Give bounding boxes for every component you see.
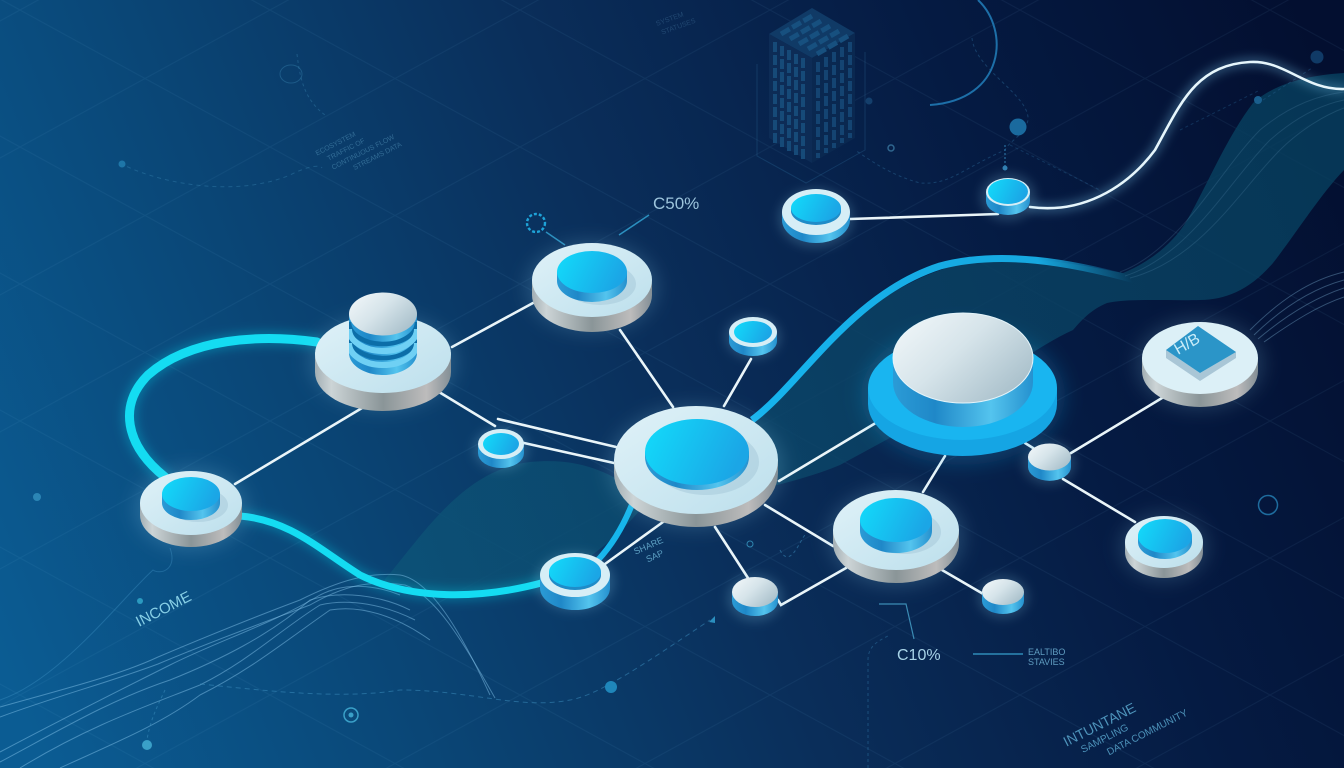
text: faint label top left: CONTINUOUS FLOW — [331, 134, 396, 172]
text: faint label top left: ECOSYSTEM — [315, 131, 357, 157]
text: faint label top centre — [655, 8, 697, 37]
node: small silver right — [1022, 441, 1076, 485]
dashed routes bottom — [0, 535, 890, 768]
left cyan loop flow — [129, 339, 317, 477]
text: faint label top centre: STATUSES — [661, 18, 697, 37]
icon: HB chip tile: H/B — [1172, 330, 1203, 358]
node: small silver lower centre — [727, 574, 783, 622]
icon: small markers — [33, 160, 1278, 750]
callout: C10% with side note: EALTIBO — [1028, 647, 1065, 657]
text: faint label top centre: SYSTEM — [655, 11, 685, 28]
node: small left centre — [473, 427, 529, 471]
lower cyan flow — [240, 502, 633, 595]
icon: dotted target ring — [527, 214, 565, 245]
upper blue flow — [752, 259, 1135, 420]
label: bottom right note: INTUNTANE — [1061, 699, 1138, 749]
node: far right — [1120, 513, 1208, 581]
callout: C10% with side note: C10% — [897, 647, 941, 664]
text: faint label top left: TRAFFIC OF — [326, 138, 366, 163]
node: bottom ring — [535, 552, 615, 612]
node: top ring — [778, 188, 854, 248]
callout: C50%: C50% — [653, 194, 699, 213]
node: top small — [980, 173, 1036, 221]
text: faint label top left: STREAMS DATA — [352, 141, 403, 172]
node: HB chip — [1136, 318, 1264, 410]
background building — [757, 8, 865, 183]
callout: C50% — [619, 194, 699, 235]
white top flow — [1030, 62, 1344, 208]
text: faint label top left — [315, 115, 403, 184]
node: lower right hub — [828, 487, 964, 587]
arc and dashed routes top right — [855, 0, 1312, 190]
faint lines right of wave — [1120, 92, 1344, 342]
node: left — [134, 467, 248, 551]
faint notes top left — [120, 54, 325, 187]
flowing teal wave band — [380, 73, 1344, 596]
label: INCOME: INCOME — [133, 588, 194, 631]
node: database — [309, 292, 457, 411]
label: small note near centre: SAP — [644, 548, 665, 564]
background flow lines bottom left — [0, 574, 495, 768]
icon: stacked cylinder — [349, 292, 417, 375]
label: bottom right note: DATA COMMUNITY — [1105, 708, 1190, 758]
callout: C10% with side note: STAVIES — [1028, 657, 1065, 667]
label: small note near centre: SHARE — [632, 535, 665, 557]
label: bottom right note: SAMPLING — [1079, 722, 1131, 756]
node: large dome — [861, 313, 1065, 465]
node: upper centre — [526, 241, 658, 333]
connector lines — [235, 214, 1162, 605]
node: small silver bottom — [977, 575, 1029, 619]
callout: C10% with side note — [879, 604, 1065, 667]
node: small top centre — [725, 315, 781, 359]
label: small note near centre — [632, 535, 670, 568]
icon: small dots top right — [866, 50, 1324, 170]
label: bottom right note — [1061, 679, 1190, 768]
node: central hub — [608, 405, 784, 529]
